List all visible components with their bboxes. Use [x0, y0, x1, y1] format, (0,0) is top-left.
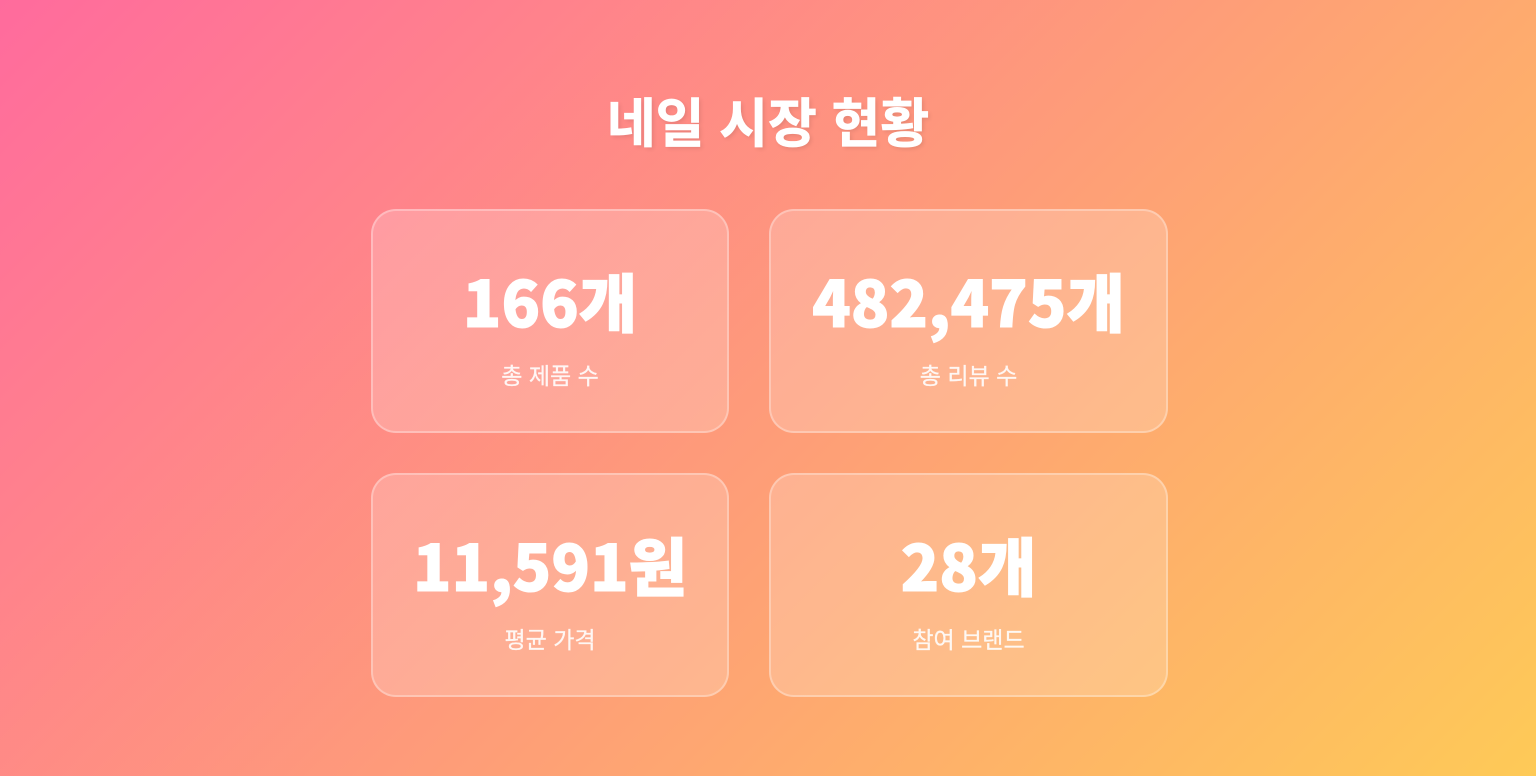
label: total reviews: 총 리뷰 수	[920, 357, 1017, 391]
label: participating brands: 참여 브랜드	[912, 621, 1025, 655]
panel: average price	[371, 473, 729, 697]
label: total products: 총 제품 수	[501, 357, 599, 391]
number: total reviews: 482,475개	[812, 254, 1125, 346]
panel: total products	[371, 209, 729, 433]
number: total products: 166개	[463, 254, 637, 346]
panel: total reviews	[769, 209, 1168, 433]
label: average price: 평균 가격	[504, 621, 596, 655]
title: 네일 시장 현황	[607, 82, 929, 158]
number: average price: 11,591원	[413, 518, 687, 610]
panel: participating brands	[769, 473, 1168, 697]
number: participating brands: 28개	[901, 518, 1036, 610]
